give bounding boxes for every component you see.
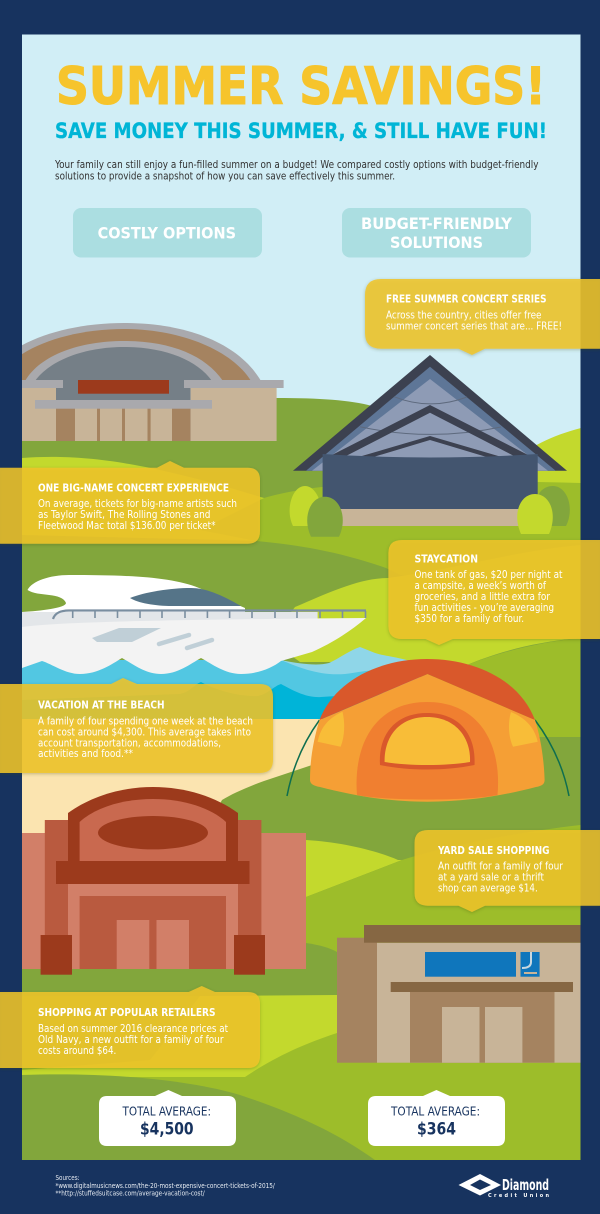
callout: free summer concert series [365, 279, 600, 355]
total average: costly: TOTAL AVERAGE: [122, 1104, 211, 1118]
callout: vacation at the beach: account transportation, accommodations, [38, 736, 221, 749]
sources: *www.digitalmusicnews.com/the-20-most-expensive-concert-tickets-of-2015/ [56, 1182, 276, 1190]
heading: budget-friendly solutions: SOLUTIONS [390, 233, 483, 252]
callout: staycation: fun activities - you’re averaging [414, 601, 554, 614]
total average: budget-friendly: TOTAL AVERAGE: [390, 1104, 480, 1118]
heading: budget-friendly solutions: BUDGET-FRIENDLY [361, 214, 513, 233]
title: SUMMER SAVINGS! [56, 57, 546, 117]
total average: budget-friendly: $364 [417, 1120, 456, 1140]
callout: one big-name concert experience [0, 461, 260, 544]
callout: staycation: a campsite, a week’s worth of [414, 579, 546, 592]
callout: one big-name concert experience: On average, tickets for big-name artists such [38, 497, 237, 510]
heading: costly options [73, 208, 262, 258]
logo: Diamond Credit Union: Diamond [502, 1176, 549, 1194]
heading: budget-friendly solutions [342, 208, 531, 258]
sources: Sources: [56, 1174, 80, 1182]
sources [56, 1174, 276, 1198]
illustration: outdoor pavilion [290, 355, 570, 537]
callout: staycation: groceries, and a little extra for [414, 590, 551, 603]
callout: staycation: One tank of gas, $20 per night at [414, 568, 563, 581]
callout: yard sale shopping [414, 830, 600, 912]
callout: one big-name concert experience: Fleetwood Mac total $136.00 per ticket* [38, 519, 216, 532]
callout: one big-name concert experience: as Taylor Swift, The Rolling Stones and [38, 508, 210, 521]
logo: Diamond Credit Union: Credit Union [488, 1193, 549, 1199]
callout: yard sale shopping: shop can average $14. [438, 882, 538, 895]
logo: Diamond Credit Union [458, 1174, 549, 1199]
callout: yard sale shopping: at a yard sale or a thrift [438, 871, 544, 884]
callout: yard sale shopping: YARD SALE SHOPPING [437, 845, 550, 857]
callout: shopping at popular retailers [0, 986, 260, 1068]
illustration: orange tent [287, 659, 569, 802]
callout: free summer concert series: Across the country, cities offer free [386, 308, 542, 321]
callout: shopping at popular retailers: Old Navy, a new outfit for a family of four [38, 1033, 224, 1046]
heading: costly options: COSTLY OPTIONS [98, 224, 236, 243]
illustration: yacht and waves [22, 575, 366, 674]
callout: yard sale shopping: An outfit for a family of four [438, 860, 564, 873]
total average: costly: $4,500 [140, 1120, 194, 1140]
callout: staycation: $350 for a family of four. [414, 612, 524, 625]
callout: shopping at popular retailers: Based on summer 2016 clearance prices at [38, 1022, 228, 1035]
intro text block: Your family can still enjoy a fun-filled summer on a budget! We compared costly options with budget-friendly [54, 158, 539, 171]
callout: free summer concert series: FREE SUMMER CONCERT SERIES [386, 294, 547, 306]
callout: one big-name concert experience: ONE BIG-NAME CONCERT EXPERIENCE [38, 482, 229, 494]
callout: staycation [388, 540, 600, 645]
callout: vacation at the beach [0, 678, 273, 773]
sources: **http://stuffedsuitcase.com/average-vacation-cost/ [56, 1190, 205, 1198]
subtitle: SAVE MONEY THIS SUMMER, & STILL HAVE FUN! [55, 119, 547, 143]
callout: shopping at popular retailers: SHOPPING AT POPULAR RETAILERS [38, 1007, 216, 1019]
intro text block [54, 158, 539, 182]
illustration: concert stadium [0, 323, 284, 441]
total average: costly [99, 1090, 236, 1146]
callout: vacation at the beach: A family of four spending one week at the beach [38, 714, 253, 727]
icon: store logo [520, 952, 540, 977]
illustration: thrift store [337, 925, 580, 1063]
illustration: department store [22, 787, 306, 975]
bushes [290, 486, 570, 537]
railing [53, 610, 366, 619]
callout: shopping at popular retailers: costs around $64. [38, 1044, 116, 1057]
callout: vacation at the beach: can cost around $4,300. This average takes into [38, 725, 251, 738]
callout: vacation at the beach: activities and food.** [38, 747, 133, 760]
callout: staycation: STAYCATION [414, 554, 478, 566]
intro text block: solutions to provide a snapshot of how you can save effectively this summer. [55, 170, 395, 182]
total average: budget-friendly [368, 1090, 505, 1146]
callout: free summer concert series: summer concert series that are... FREE! [386, 319, 562, 332]
callout: vacation at the beach: VACATION AT THE BEACH [38, 700, 165, 712]
